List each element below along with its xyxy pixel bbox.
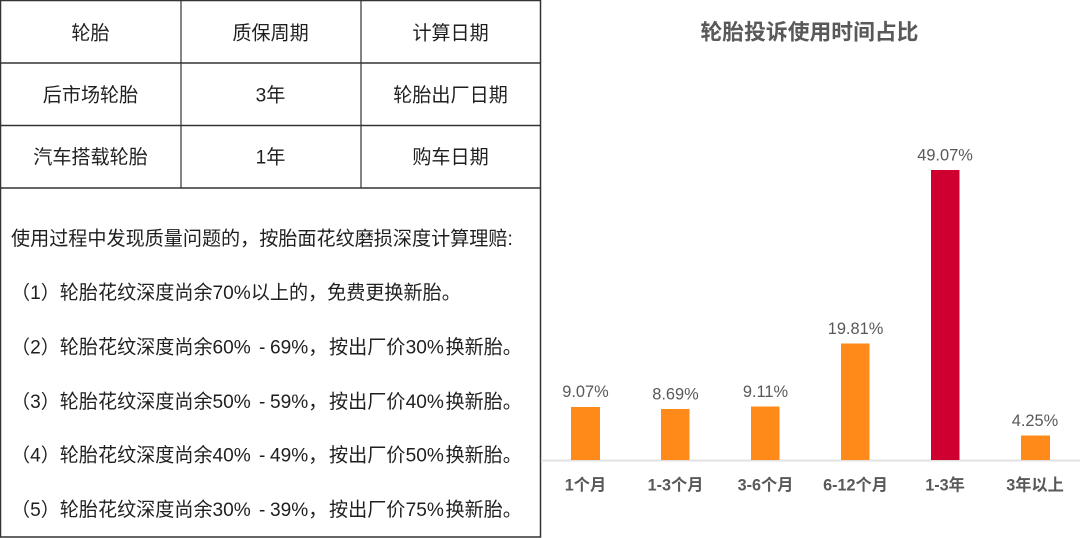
claims rules text: 59%， [270,392,327,413]
bar: 6-12个月 [823,320,888,494]
claims rules text: 使用过程中发现质量问题的，按胎面花纹磨损深度计算理赔: [11,228,513,250]
claims rules text: - [259,392,265,413]
claims rules text: 换新胎。 [446,444,522,466]
claims rules text: 换新胎。 [446,336,522,358]
claims rules text: - [259,338,265,358]
table header row [71,22,489,44]
claims rules text: 49%， [270,446,327,466]
claims rules text: （5）轮胎花纹深度尚余30% [11,500,251,521]
bar: 6-12个月: 6-12个月 [823,476,888,494]
bar: 1-3个月: 1-3个月 [648,476,703,494]
claims rules text: 换新胎。 [446,391,522,413]
bar: 1个月 [562,383,609,494]
bar: 3年以上: 3年以上 [1006,476,1064,494]
table row: aftermarket tires: 3年 [256,84,285,106]
chart title: 轮胎投诉使用时间占比 [701,20,918,44]
claims rules text: （4）轮胎花纹深度尚余40% [11,446,251,466]
claims rules text: 按出厂价 [329,444,405,466]
bar: 3-6个月: 3-6个月 [738,476,793,494]
claims rules text: 75% [406,500,444,521]
claims rules text: 39%， [270,500,327,521]
claims rules text: 30% [406,338,444,358]
bar: 3年以上 [1006,412,1064,494]
claims rules text: 按出厂价 [329,391,405,413]
table row: aftermarket tires: 轮胎出厂日期 [393,84,508,106]
table header row: 计算日期 [412,22,489,44]
claims rules text: （2）轮胎花纹深度尚余60% [11,338,251,358]
table row: factory-fitted tires [33,146,489,168]
bar: 3-6个月 [738,383,793,494]
claims rules text: 换新胎。 [446,499,522,521]
table header row: 轮胎 [71,22,110,44]
claims rules text [11,228,522,521]
claims rules text: 按出厂价 [329,499,405,521]
bar chart: complaint share by usage time [541,146,1080,494]
claims rules text: - [259,446,265,466]
claims rules text: 40% [406,392,444,413]
table row: factory-fitted tires: 1年 [256,146,285,168]
claims rules text: （3）轮胎花纹深度尚余50% [11,392,251,413]
bar: 6-12个月: 19.81% [828,320,883,338]
claims rules text: 69%， [270,338,327,358]
bar: 1个月: 1个月 [565,476,606,494]
table row: aftermarket tires [43,84,508,106]
bar: 1-3个月: 8.69% [652,386,699,404]
table row: factory-fitted tires: 购车日期 [412,146,489,168]
bar: 3-6个月: 9.11% [743,383,788,401]
bar: 1-3个月 [648,386,703,494]
bar: 1-3年 highlighted [917,146,973,494]
table row: factory-fitted tires: 汽车搭载轮胎 [33,146,148,168]
claims rules text: - [259,500,265,521]
bar: 3年以上: 4.25% [1012,412,1058,430]
bar: 1-3年 highlighted: 49.07% [917,146,973,164]
table header row: 质保周期 [232,22,309,44]
table row: aftermarket tires: 后市场轮胎 [43,84,138,106]
bar: 1个月: 9.07% [562,383,609,401]
panel: warranty table [0,0,541,537]
claims rules text: （1）轮胎花纹深度尚余70%以上的，免费更换新胎。 [11,282,461,304]
claims rules text: 按出厂价 [329,336,405,358]
claims rules text: 50% [406,446,444,466]
bar: 1-3年 highlighted: 1-3年 [925,476,965,494]
